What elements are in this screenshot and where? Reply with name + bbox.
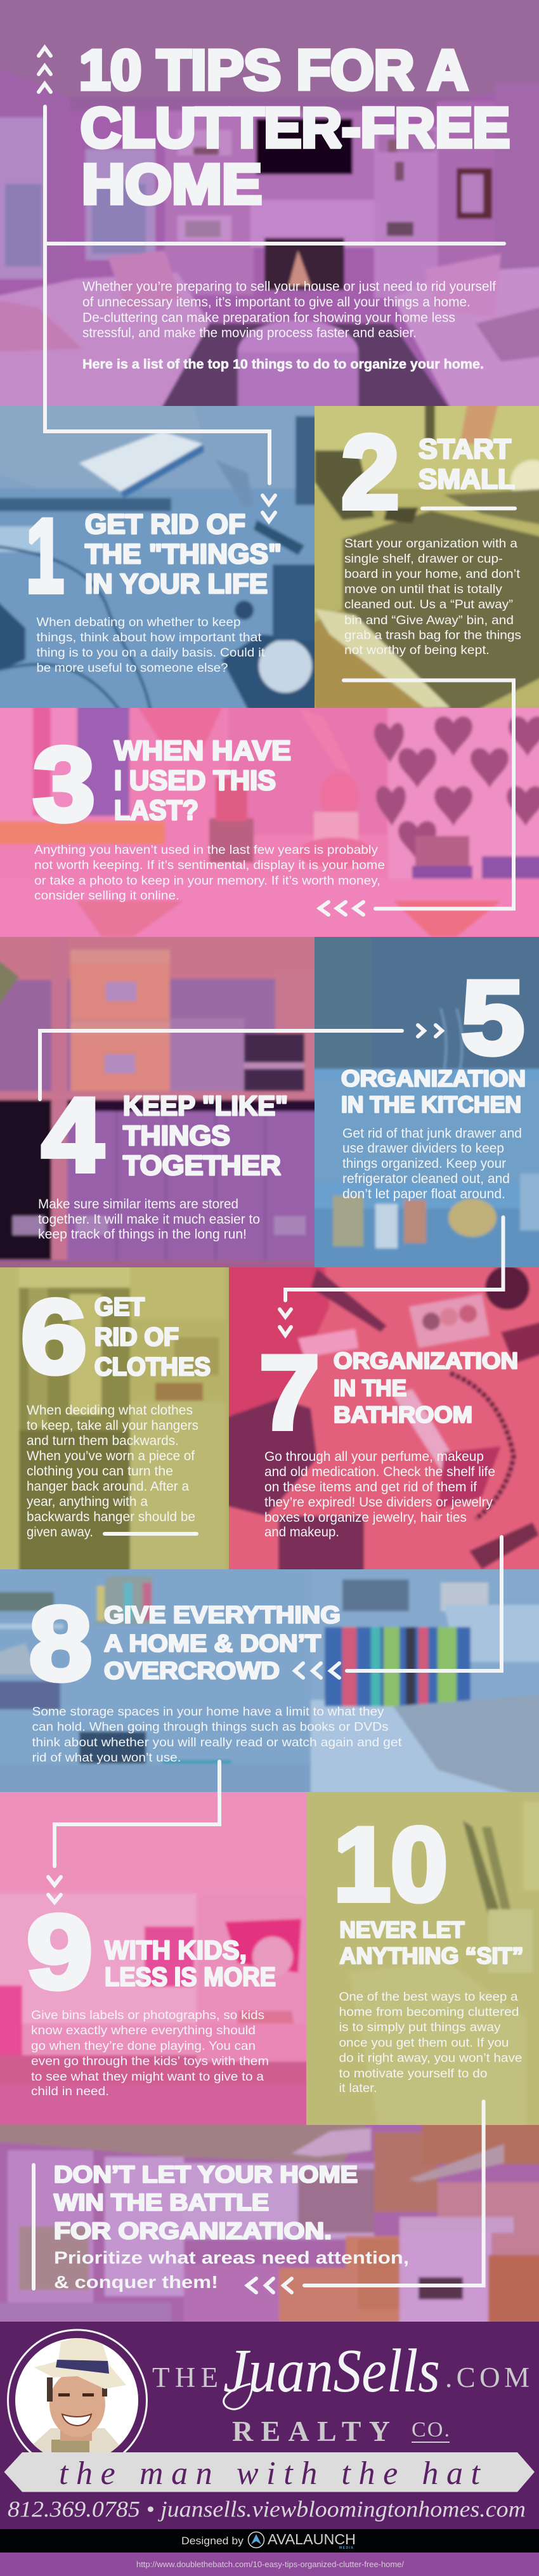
- tip 6 body text: clothing you can turn the: [27, 1464, 173, 1479]
- tip 9 body text: to see what they might want to give to a: [31, 2070, 264, 2084]
- tip 1 body text: things, think about how important that: [37, 631, 262, 644]
- intro text: Here is a list of the top 10 things to do to organize your home.: [82, 357, 484, 372]
- tip 6 heading: CLOTHES: [94, 1353, 211, 1381]
- tip 7 heading: BATHROOM: [334, 1402, 472, 1427]
- designer credit bar: Designed by: [181, 2535, 244, 2547]
- tip 3 body text: not worth keeping. If it’s sentimental, display it is your home: [34, 858, 385, 872]
- connector line tip 4 to tip 5: [40, 1031, 402, 1099]
- tip 6 body text: backwards hanger should be: [27, 1510, 195, 1524]
- tip 1 heading: IN YOUR LIFE: [85, 568, 268, 599]
- tip 6 body text: year, anything with a: [27, 1494, 148, 1509]
- tip 7 body text: and makeup.: [264, 1525, 339, 1540]
- tip 5 body text: don’t let paper float around.: [342, 1187, 505, 1201]
- tip 9 body text: go when they’re done playing. You can: [31, 2039, 256, 2053]
- tip 7 heading: IN THE: [334, 1375, 406, 1401]
- closing subtext: [54, 2248, 409, 2292]
- closing subtext: Prioritize what areas need attention,: [54, 2248, 409, 2267]
- icon: up chevrons: [39, 48, 51, 92]
- hero title: CLUTTER-FREE: [81, 96, 510, 159]
- tip 5 body text: refrigerator cleaned out, and: [342, 1172, 510, 1186]
- tip 9 heading: LESS IS MORE: [105, 1961, 276, 1992]
- tip 2 body text: single shelf, drawer or cup-: [344, 552, 503, 566]
- tip 2 body text: not worthy of being kept.: [344, 643, 490, 657]
- tip 1 heading: GET RID OF: [85, 509, 245, 540]
- tip 1 background photo: desk items: [0, 406, 315, 708]
- tip 8 heading: OVERCROWD: [104, 1658, 280, 1685]
- tip 6 heading: GET: [94, 1293, 145, 1321]
- designer credit bar: AVALAUNCH: [268, 2531, 356, 2547]
- designer credit bar: [0, 2529, 539, 2553]
- tip 8 body text: rid of what you won’t use.: [32, 1751, 181, 1765]
- tip 3 heading: LAST?: [114, 795, 198, 826]
- tip 5 body text: Get rid of that junk drawer and: [342, 1126, 522, 1141]
- panel: tip 3: [0, 695, 539, 950]
- intro text: stressful, and make the moving process faster and easier.: [82, 326, 417, 340]
- tip 7 body text: and old medication. Check the shelf life: [264, 1465, 495, 1479]
- tip 10 body text: to motivate yourself to do: [339, 2067, 488, 2081]
- sofas: [0, 273, 209, 419]
- closing background photo: kitchen: [0, 2125, 539, 2322]
- tip 10 body text: [339, 1990, 523, 2095]
- tip 8 heading: A HOME & DON’T: [104, 1630, 321, 1657]
- tip 10 body text: once you get them out. If you: [339, 2036, 509, 2050]
- logo: The Juan Sells .com Realty Co.: .COM: [445, 2362, 529, 2393]
- panel: tip 10: [306, 1792, 539, 2125]
- tip 6 background photo: closet: [0, 1267, 229, 1569]
- tip 6 heading: RID OF: [94, 1323, 179, 1351]
- tip 1 body text: [37, 615, 265, 675]
- tip 9 body text: Give bins labels or photographs, so kids: [31, 2008, 264, 2022]
- tip 9 heading: WITH KIDS,: [105, 1935, 247, 1965]
- tip 10 body text: do it right away, you won’t have: [339, 2051, 523, 2065]
- tip 3 body text: Anything you haven’t used in the last few years is probably: [34, 843, 378, 857]
- television: [256, 119, 353, 174]
- tip 8 body text: think about whether you will really read or watch again and get: [32, 1736, 402, 1749]
- tip 3 background photo: child's desk with hearts: [0, 695, 539, 950]
- tip 2 body text: Start your organization with a: [344, 537, 517, 551]
- panel: tip 9: [0, 1792, 306, 2125]
- tip 2 body text: bin and “Give Away” bin, and: [344, 613, 514, 627]
- tip 7 body text: boxes to organize jewelry, hair ties: [264, 1510, 467, 1525]
- number 2: 2: [341, 414, 399, 530]
- tip 2 body text: [344, 537, 521, 657]
- designer credit bar: MEDIA: [339, 2546, 353, 2550]
- source url bar: http://www.doublethebatch.com/10-easy-tips-organized-clutter-free-home/: [136, 2560, 404, 2569]
- connector line tip 10 to closing: [304, 2102, 484, 2285]
- tip 4 body text: keep track of things in the long run!: [38, 1227, 247, 1242]
- tip 2 body text: board in your home, and don’t: [344, 567, 521, 581]
- number 6: 6: [21, 1278, 87, 1395]
- tip 8 body text: [32, 1705, 402, 1765]
- number 8: 8: [29, 1585, 92, 1702]
- tip 4 heading: [123, 1090, 288, 1181]
- tip 8 body text: can hold. When going through things such as books or DVDs: [32, 1720, 389, 1734]
- icon: down chevrons tip 1: [263, 495, 275, 521]
- tip 4 background photo: storage boxes on shelves: [0, 937, 315, 1267]
- tip 5 body text: [342, 1126, 522, 1201]
- tip 2 body text: cleaned out. Us a “Put away”: [344, 598, 513, 611]
- tip 8 body text: Some storage spaces in your home have a limit to what they: [32, 1705, 384, 1719]
- tip 7 heading: ORGANIZATION: [334, 1347, 518, 1374]
- connector line tip 5 to tip 7: [285, 1217, 503, 1300]
- number 7: 7: [259, 1334, 320, 1451]
- panel: tip 4: [0, 937, 315, 1267]
- tip 6 heading: [94, 1293, 211, 1381]
- intro text: of unnecessary items, it’s important to give all your things a home.: [82, 295, 471, 310]
- tip 9 heading: [105, 1935, 276, 1992]
- number 3: 3: [33, 726, 95, 842]
- icon: down chevrons tip 9: [48, 1877, 61, 1902]
- tip 2 body text: grab a trash bag for the things: [344, 628, 521, 642]
- tip 3 body text: consider selling it online.: [34, 889, 179, 903]
- connector line hero to tip 1: [45, 107, 504, 483]
- intro text: Whether you’re preparing to sell your house or just need to rid yourself: [82, 279, 496, 294]
- tip 4 body text: [38, 1197, 260, 1242]
- tip 2 body text: move on until that is totally: [344, 582, 502, 596]
- tip 9 background photo: kids room: [0, 1792, 306, 2125]
- tip 5 heading: ORGANIZATION: [341, 1066, 526, 1091]
- logo: The Juan Sells .com Realty Co.: [152, 2337, 529, 2447]
- icon: Avalaunch logo: [249, 2532, 264, 2547]
- tip 4 body text: together. It will make it much easier to: [38, 1212, 260, 1227]
- tip 3 body text: or take a photo to keep in your memory. If it’s worth money,: [34, 874, 380, 888]
- logo: The Juan Sells .com Realty Co.: REALTY: [232, 2415, 390, 2447]
- tip 7 body text: on these items and get rid of them if: [264, 1480, 477, 1494]
- tip 5 body text: use drawer dividers to keep: [342, 1141, 504, 1156]
- tip 6 body text: to keep, take all your hangers: [27, 1418, 198, 1433]
- tip 5 heading: [341, 1066, 526, 1118]
- closing subtext: & conquer them!: [54, 2272, 218, 2292]
- tip 5 heading: IN THE KITCHEN: [341, 1091, 521, 1118]
- tagline banner: the man with the hat: [59, 2455, 481, 2492]
- intro text: De-cluttering can make preparation for showing your home less: [82, 311, 455, 325]
- panel: tip 8: [0, 1569, 539, 1792]
- number 5: 5: [461, 959, 524, 1076]
- hero title: 10 TIPS FOR A: [79, 38, 468, 101]
- tip 3 heading: [114, 735, 291, 826]
- tip 1 body text: be more useful to someone else?: [37, 661, 228, 675]
- tip 6 body text: [27, 1403, 198, 1540]
- tip 7 body text: they’re expired! Use dividers or jewelry: [264, 1495, 493, 1510]
- tip 6 body text: hanger back around. After a: [27, 1479, 189, 1494]
- tip 1 body text: thing is to you on a daily basis. Could it: [37, 646, 265, 660]
- tip 9 body text: know exactly where everything should: [31, 2024, 256, 2037]
- tip 4 body text: Make sure similar items are stored: [38, 1197, 238, 1212]
- tip 9 body text: [31, 2008, 269, 2098]
- connector line tip 2 to tip 3: [344, 680, 514, 908]
- panel: realtor footer: [0, 2322, 539, 2529]
- tip 9 body text: child in need.: [31, 2084, 109, 2098]
- tip 10 body text: it later.: [339, 2081, 377, 2095]
- tip 3 heading: WHEN HAVE: [114, 735, 291, 766]
- tip 10 background photo: paint brushes and book: [306, 1792, 539, 2125]
- logo: The Juan Sells .com Realty Co.: JuanSells: [223, 2337, 440, 2405]
- tip 7 body text: Go through all your perfume, makeup: [264, 1449, 484, 1464]
- panel: tip 1: [0, 406, 315, 708]
- tip 2 heading: START: [419, 434, 511, 464]
- icon: left chevrons closing: [247, 2279, 292, 2292]
- connector line tip 8 to tip 9: [55, 1762, 219, 1866]
- tip 6 body text: When you’ve worn a piece of: [27, 1449, 195, 1463]
- logo: The Juan Sells .com Realty Co.: CO.: [412, 2418, 450, 2442]
- number 4: 4: [42, 1076, 103, 1193]
- tip 7 background photo: makeup and jewelry: [229, 1267, 539, 1569]
- tip 10 heading: ANYTHING “SIT”: [340, 1942, 524, 1969]
- tip 2 heading: [419, 434, 515, 509]
- closing heading: FOR ORGANIZATION.: [54, 2218, 332, 2244]
- panel: tip 6: [0, 1267, 229, 1569]
- hero title: [79, 38, 510, 216]
- tip 7 body text: [264, 1449, 495, 1540]
- tip 3 heading: I USED THIS: [114, 765, 276, 796]
- tip 5 body text: things organized. Keep your: [342, 1156, 506, 1171]
- logo: The Juan Sells .com Realty Co.: THE: [152, 2362, 218, 2393]
- tip 6 body text: When deciding what clothes: [27, 1403, 193, 1418]
- closing heading: [54, 2162, 358, 2244]
- tip 7 heading: [334, 1347, 518, 1427]
- tip 4 heading: THINGS: [123, 1120, 230, 1151]
- tip 8 heading: GIVE EVERYTHING: [104, 1602, 341, 1629]
- fireplace: [264, 238, 344, 290]
- icon: down chevrons tip 7: [280, 1309, 291, 1335]
- tip 6 body text: and turn them backwards.: [27, 1434, 179, 1448]
- icon: right chevrons tip 5: [418, 1025, 442, 1036]
- tip 8 heading: [104, 1602, 341, 1685]
- tip 1 body text: When debating on whether to keep: [37, 615, 241, 629]
- icon: left chevrons tip 3: [320, 902, 363, 915]
- intro text: [82, 279, 496, 372]
- tip 10 heading: NEVER LET: [340, 1917, 465, 1942]
- contact details: 812.369.0785 • juansells.viewbloomingtonhomes.com: [8, 2497, 526, 2522]
- hero title: HOME: [82, 152, 262, 216]
- tip 8 background photo: living room shelves and couch: [0, 1569, 539, 1792]
- number 9: 9: [27, 1893, 93, 2010]
- tip 3 body text: [34, 843, 385, 903]
- closing heading: DON’T LET YOUR HOME: [54, 2162, 358, 2187]
- tip 10 body text: is to simply put things away: [339, 2020, 501, 2034]
- tip 2 background photo: desk drawer: [315, 406, 539, 708]
- source url bar: [0, 2553, 539, 2576]
- tip 1 heading: [85, 509, 282, 599]
- panel: tip 7: [229, 1267, 539, 1569]
- rug: [161, 322, 450, 406]
- tip 2 heading: SMALL: [419, 464, 515, 495]
- panel: tip 2: [315, 406, 539, 708]
- tip 10 body text: One of the best ways to keep a: [339, 1990, 518, 2004]
- panel: hero introduction: [0, 0, 539, 419]
- closing heading: WIN THE BATTLE: [54, 2190, 269, 2215]
- hero background photo: living room: [0, 0, 539, 419]
- tip 5 background photo: kitchen counter: [315, 937, 539, 1267]
- number 10: 10: [334, 1806, 448, 1923]
- tip 10 heading: [340, 1917, 524, 1969]
- tip 4 heading: KEEP "LIKE": [123, 1090, 288, 1121]
- connector line tip 7 to tip 8: [347, 1537, 502, 1671]
- tip 4 heading: TOGETHER: [123, 1150, 281, 1181]
- tip 10 body text: home from becoming cluttered: [339, 2005, 519, 2019]
- tip 1 heading: THE "THINGS": [85, 539, 282, 570]
- number 1: 1: [26, 497, 64, 614]
- tip 6 body text: given away.: [27, 1525, 93, 1540]
- tip 9 body text: even go through the kids’ toys with them: [31, 2055, 269, 2069]
- icon: left chevrons tip 8: [295, 1663, 339, 1678]
- panel: tip 5: [315, 937, 539, 1267]
- portrait of the realtor: [7, 2329, 148, 2452]
- panel: closing call to action: [0, 2125, 539, 2322]
